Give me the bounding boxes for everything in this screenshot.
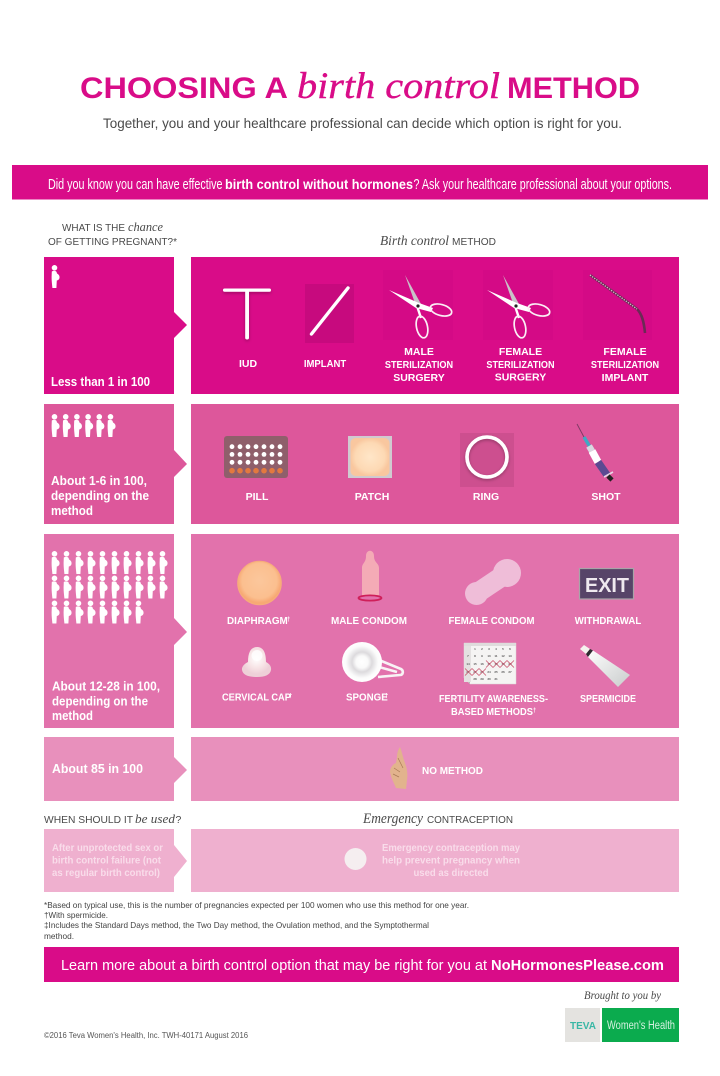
icon: fertility calendar: 12 — [501, 654, 505, 658]
icon: pill pack — [224, 436, 288, 478]
column heading: method — [380, 234, 496, 249]
icon: male condom — [358, 551, 382, 601]
icon: sponge — [342, 642, 403, 682]
row 4 chance panel — [44, 737, 187, 801]
label: fertility awareness-based methods: † — [533, 708, 536, 714]
icon: fertility calendar: 27 — [508, 670, 512, 674]
top banner — [12, 165, 708, 200]
label: female sterilization surgery — [486, 346, 555, 384]
bottom call to action banner: Learn more about a birth control option that may be right for you at — [61, 957, 488, 974]
icon: fertility calendar: 26 — [501, 670, 505, 674]
chance text — [52, 680, 160, 723]
icon: exit sign: EXIT — [585, 575, 629, 597]
icon: emergency pill — [344, 848, 366, 870]
emergency text: Emergency contraception may — [382, 842, 520, 854]
icon: fertility calendar: 4 — [495, 647, 497, 651]
icon: cervical cap — [242, 647, 271, 677]
icon: fertility calendar: 13 — [508, 654, 512, 658]
label: sponge: † — [385, 694, 388, 700]
when text: as regular birth control) — [52, 867, 160, 879]
footnotes: *Based on typical use, this is the number of pregnancies expected per 100 women who use this method for one year. — [44, 900, 469, 910]
label: fertility awareness-based methods: FERTILITY AWARENESS- — [439, 693, 548, 705]
icon: fertility calendar: 20 — [508, 662, 512, 666]
label: ring: RING — [473, 491, 499, 503]
emergency heading: when used: WHEN SHOULD IT — [44, 814, 134, 826]
chance text: method — [51, 504, 93, 518]
label: female sterilization implant: STERILIZATION — [591, 359, 659, 371]
subtitle: Together, you and your healthcare professional can decide which option is right for you. — [103, 115, 622, 131]
footnotes: †With spermicide. — [44, 910, 108, 920]
icon: fertility calendar: 31 — [494, 677, 498, 681]
footnotes — [44, 900, 469, 941]
emergency text: used as directed — [414, 867, 488, 879]
title — [80, 66, 640, 107]
label: male condom: MALE CONDOM — [331, 615, 407, 627]
label: female sterilization implant — [591, 346, 659, 384]
label: diaphragm: DIAPHRAGM — [227, 616, 288, 627]
title: birth control — [297, 66, 500, 107]
icon: fertility calendar: 6 — [509, 647, 511, 651]
label: female sterilization surgery: STERILIZATION — [486, 359, 555, 371]
icon: fertility calendar: 8 — [474, 654, 476, 658]
label: pill: PILL — [246, 491, 269, 503]
icon: fertility calendar: 11 — [494, 654, 498, 658]
icon: fertility calendar: 16 — [480, 662, 484, 666]
bottom call to action banner — [44, 947, 679, 982]
chance text: About 12-28 in 100, — [52, 680, 160, 694]
icon: fertility calendar: 28 — [473, 677, 477, 681]
logo: Teva Women's Health: TEVA — [570, 1021, 596, 1032]
label: male sterilization surgery: STERILIZATION — [385, 359, 453, 371]
row 1 methods panel — [191, 257, 679, 394]
icon: fertility calendar: 30 — [487, 677, 491, 681]
chance text: depending on the — [51, 489, 149, 503]
top banner: birth control without hormones — [225, 176, 413, 192]
label: shot: SHOT — [591, 491, 621, 503]
column heading: method: Birth control — [380, 234, 449, 249]
icon: one pregnant figure — [52, 265, 60, 288]
label: male sterilization surgery: MALE — [404, 346, 434, 358]
when text — [52, 842, 163, 879]
icon: fertility calendar: 18 — [494, 662, 498, 666]
icon: diaphragm — [238, 561, 281, 605]
icon: spermicide tube — [580, 645, 630, 687]
icon: 28 pregnant figures — [52, 551, 168, 624]
icon: fertility calendar: 7 — [467, 654, 469, 658]
copyright: ©2016 Teva Women's Health, Inc. TWH-40171 August 2016 — [44, 1031, 249, 1040]
icon: fertility calendar: 22 — [473, 670, 477, 674]
emergency heading: contraception: CONTRACEPTION — [427, 814, 513, 826]
top banner: Did you know you can have effective — [48, 176, 222, 193]
icon: fertility calendar: 10 — [487, 654, 491, 658]
label: implant: IMPLANT — [304, 359, 347, 370]
row 3 methods panel — [191, 534, 679, 728]
icon: six pregnant figures — [52, 414, 116, 437]
icon: sterilization implant coil — [583, 270, 652, 340]
label: male sterilization surgery: SURGERY — [393, 372, 445, 384]
footnotes: ‡Includes the Standard Days method, the Two Day method, the Ovulation method, and the Symptothermal — [44, 920, 429, 930]
emergency text: help prevent pregnancy when — [382, 854, 520, 866]
label: female sterilization surgery: FEMALE — [499, 346, 542, 358]
icon: fertility calendar: 25 — [494, 670, 498, 674]
label: spermicide: SPERMICIDE — [580, 693, 636, 705]
label: diaphragm: † — [287, 617, 290, 623]
icon: fertility calendar: 17 — [487, 662, 491, 666]
emergency heading: contraception — [362, 811, 513, 827]
chance text: depending on the — [52, 694, 148, 708]
label: cervical cap: † — [289, 694, 292, 700]
label: male sterilization surgery — [385, 346, 453, 384]
label: female condom: FEMALE CONDOM — [448, 615, 535, 627]
icon: fertility calendar: 3 — [488, 647, 490, 651]
label: withdrawal: WITHDRAWAL — [575, 615, 642, 627]
row 3 chance panel — [44, 534, 187, 728]
row 2 methods panel — [191, 404, 679, 524]
sponsor line: Brought to you by — [584, 988, 662, 1002]
emergency heading: when used: ? — [176, 814, 182, 826]
icon: patch — [348, 436, 392, 478]
label: patch: PATCH — [355, 491, 389, 503]
label: no method: NO METHOD — [422, 765, 483, 777]
emergency heading: when used: be used — [135, 811, 175, 826]
icon: ring — [460, 433, 514, 487]
label: female sterilization implant: FEMALE — [603, 346, 647, 358]
column heading: chance: OF GETTING PREGNANT?* — [48, 236, 177, 248]
icon: fertility calendar: 21 — [466, 670, 470, 674]
row 5 when panel — [44, 829, 187, 892]
label: fertility awareness-based methods — [439, 693, 548, 718]
icon: female condom — [465, 559, 521, 605]
icon: fertility calendar: 1 — [474, 647, 476, 651]
chance text: Less than 1 in 100 — [51, 375, 150, 389]
row 4 methods panel — [191, 737, 679, 801]
icon: exit sign — [580, 568, 634, 599]
chance text: About 85 in 100 — [52, 762, 143, 776]
icon: fertility calendar — [464, 643, 516, 684]
label: cervical cap: CERVICAL CAP — [222, 692, 291, 704]
bottom call to action banner: NoHormonesPlease.com — [491, 957, 664, 974]
label: IUD: IUD — [239, 358, 257, 370]
icon: fertility calendar: 9 — [481, 654, 483, 658]
logo: Teva Women's Health — [565, 1008, 679, 1042]
emergency heading: contraception: Emergency — [362, 811, 423, 827]
icon: crossed fingers hand — [390, 747, 407, 789]
icon: fertility calendar: 15 — [473, 662, 477, 666]
icon: fertility calendar: 19 — [501, 662, 505, 666]
icon: fertility calendar: 24 — [487, 670, 491, 674]
icon: fertility calendar: 29 — [480, 677, 484, 681]
icon: IUD — [223, 288, 271, 340]
icon: scissors, male surgery — [383, 270, 453, 340]
label: fertility awareness-based methods: BASED METHODS — [451, 706, 533, 718]
chance text: About 1-6 in 100, — [51, 474, 147, 488]
chance text — [51, 474, 149, 518]
icon: scissors, female surgery — [483, 270, 553, 340]
label: female sterilization surgery: SURGERY — [495, 372, 546, 384]
column heading: chance: WHAT IS THE — [62, 222, 125, 234]
label: female sterilization implant: IMPLANT — [602, 372, 649, 384]
column heading: chance: chance — [128, 219, 163, 234]
chance text: method — [52, 709, 93, 723]
icon: fertility calendar: 2 — [481, 647, 483, 651]
emergency heading: when used — [44, 811, 182, 826]
label: sponge: SPONGE — [346, 692, 388, 704]
when text: birth control failure (not — [52, 854, 161, 866]
icon: fertility calendar: 23 — [480, 670, 484, 674]
when text: After unprotected sex or — [52, 842, 163, 854]
emergency text — [382, 842, 520, 879]
row 1 chance panel — [44, 257, 187, 394]
icon: fertility calendar: 14 — [466, 662, 470, 666]
title: METHOD — [507, 72, 640, 105]
icon: implant — [305, 284, 354, 343]
footnotes: method. — [44, 931, 74, 941]
icon: fertility calendar: 5 — [502, 647, 504, 651]
logo: Teva Women's Health: Women's Health — [607, 1020, 675, 1032]
icon: shot syringe — [577, 424, 613, 480]
row 5 emergency panel — [191, 829, 679, 892]
column heading: chance — [48, 219, 177, 248]
row 2 chance panel — [44, 404, 187, 524]
title: CHOOSING A — [80, 72, 288, 105]
column heading: method: METHOD — [452, 236, 496, 248]
